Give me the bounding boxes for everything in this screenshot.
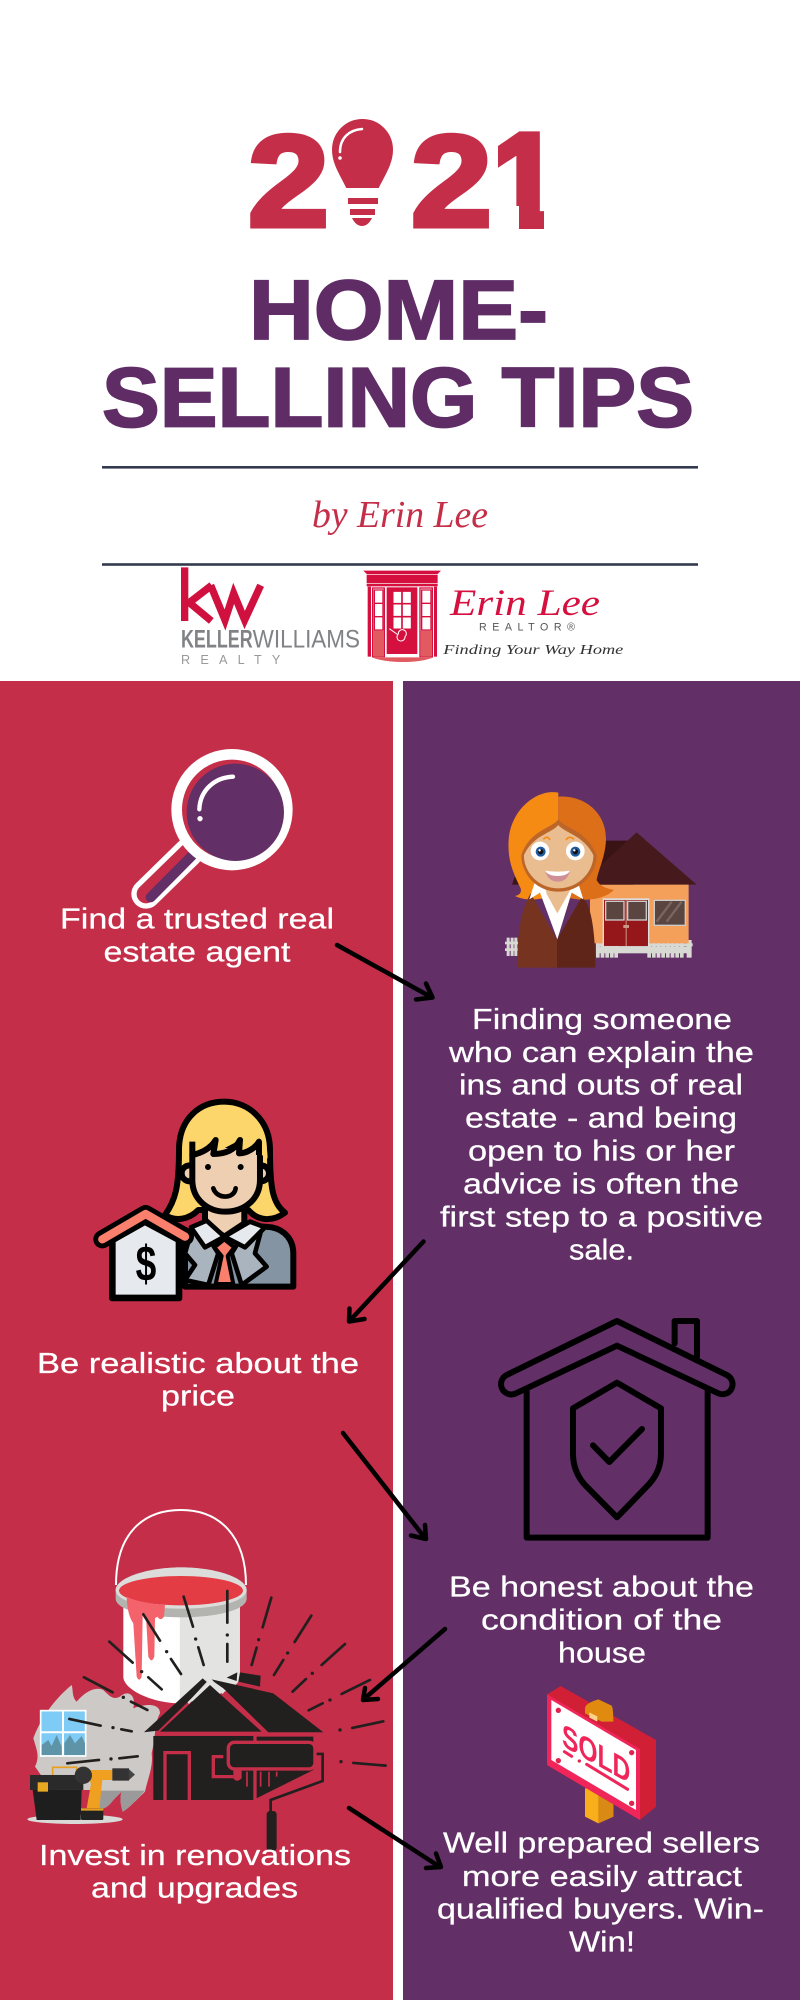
logo: keller williams realty xyxy=(181,567,360,667)
text: well prepared sellers win-win: Well prepared sellers xyxy=(443,1828,760,1860)
text: well prepared sellers win-win: more easily attract xyxy=(462,1861,742,1893)
text: be realistic about the price: price xyxy=(161,1381,235,1413)
panel: right purple column xyxy=(403,681,800,2000)
panel: left red column xyxy=(0,681,393,2000)
icon: sold sign: SOLD xyxy=(562,1717,630,1791)
text: well prepared sellers win-win: Win! xyxy=(569,1926,635,1958)
arrow: step three to four xyxy=(343,1433,426,1539)
text: be honest about the condition of the house: Be honest about the xyxy=(449,1572,754,1604)
text: be realistic about the price: Be realistic about the xyxy=(37,1348,359,1380)
text: well prepared sellers win-win xyxy=(437,1828,764,1958)
arrow: step two to three xyxy=(349,1242,424,1322)
text: find a trusted real estate agent: Find a trusted real xyxy=(60,904,334,936)
text: be honest about the condition of the house: house xyxy=(558,1637,646,1669)
logo: erin lee realtor: Finding Your Way Home xyxy=(442,643,623,658)
icon: light bulb replacing the zero xyxy=(330,117,395,226)
icon: blonde agent with house and dollar sign xyxy=(102,1102,293,1298)
text: finding someone explanation: advice is often the xyxy=(463,1169,739,1201)
title: 2021 with light bulb: 2 xyxy=(411,108,492,254)
text: finding someone explanation xyxy=(440,1004,763,1266)
logo: erin lee realtor: REALTOR® xyxy=(479,622,575,634)
text: find a trusted real estate agent: estate agent xyxy=(104,936,290,968)
icon: blonde agent with house and dollar sign: $ xyxy=(136,1236,156,1292)
text: finding someone explanation: who can explain the xyxy=(448,1037,754,1069)
icon: red door xyxy=(363,571,441,662)
text: invest in renovations and upgrades xyxy=(39,1840,351,1905)
icon: paint bucket, splash, tools and house xyxy=(27,1510,386,1851)
toolbox and drill xyxy=(27,1767,135,1824)
icon: house with shield and check xyxy=(501,1321,733,1538)
text: invest in renovations and upgrades: Invest in renovations xyxy=(39,1840,351,1872)
text: finding someone explanation: Finding someone xyxy=(472,1004,732,1036)
text: finding someone explanation: estate - and being xyxy=(465,1103,737,1135)
text: finding someone explanation: ins and outs of real xyxy=(459,1070,743,1102)
arrow: step five to six xyxy=(349,1808,441,1868)
burst rays xyxy=(67,1591,386,1766)
byline: by Erin Lee xyxy=(312,494,488,536)
title: 2021 with light bulb: 2 xyxy=(248,108,329,254)
woman xyxy=(508,792,614,968)
text: finding someone explanation: first step to a positive xyxy=(440,1202,763,1234)
paint bucket xyxy=(116,1510,247,1703)
text: be honest about the condition of the house xyxy=(449,1572,754,1669)
icon: magnifying glass xyxy=(146,754,287,897)
title: 2021 with light bulb xyxy=(250,119,544,229)
text: finding someone explanation: open to his or her xyxy=(468,1136,735,1168)
icon: red-haired agent with house xyxy=(505,792,697,968)
logo: keller williams realty: KELLER xyxy=(181,625,253,653)
text: be honest about the condition of the house: condition of the xyxy=(481,1605,722,1637)
logo: erin lee realtor xyxy=(363,571,623,662)
title: 2021 with light bulb: 1 xyxy=(489,105,561,257)
logo: erin lee realtor: Erin Lee xyxy=(449,583,600,624)
text: be realistic about the price xyxy=(37,1348,359,1413)
logo: keller williams realty: REALTY xyxy=(181,653,281,667)
arrow: step four to five xyxy=(363,1629,445,1700)
text: finding someone explanation: sale. xyxy=(569,1234,634,1266)
text: well prepared sellers win-win: qualified buyers. Win- xyxy=(437,1894,764,1926)
gray splash with window xyxy=(33,1685,160,1812)
text: find a trusted real estate agent xyxy=(60,904,334,968)
heading: home-selling tips: SELLING TIPS xyxy=(102,350,694,444)
arrow: step one to two xyxy=(337,945,432,1000)
house xyxy=(512,832,697,947)
heading: home-selling tips xyxy=(102,263,694,444)
text: invest in renovations and upgrades: and upgrades xyxy=(91,1873,298,1905)
icon: sold sign xyxy=(547,1686,656,1823)
house and paint roller xyxy=(144,1672,323,1851)
heading: home-selling tips: HOME- xyxy=(249,263,548,357)
logo: keller williams realty: WILLIAMS xyxy=(253,625,360,653)
fence xyxy=(505,938,693,958)
